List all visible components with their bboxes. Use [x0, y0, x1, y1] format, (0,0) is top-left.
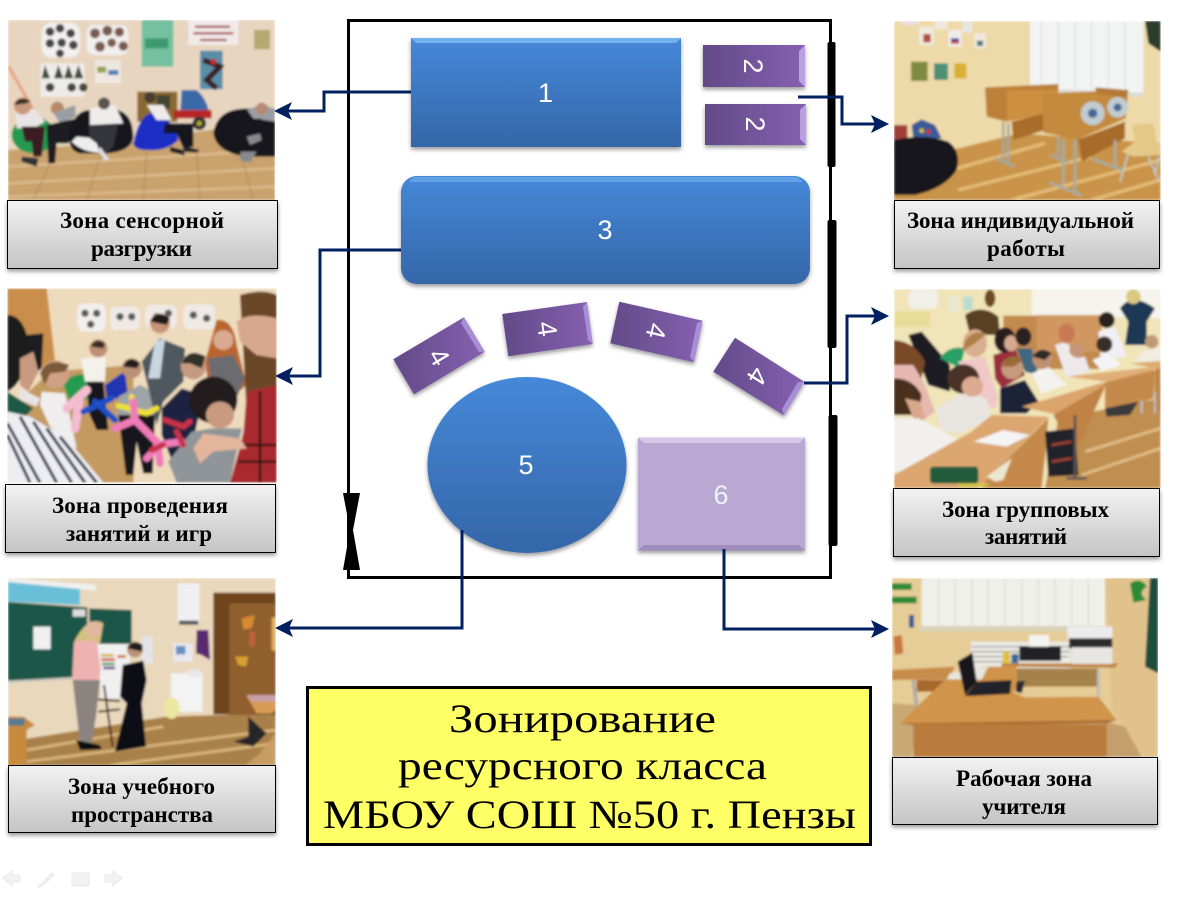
zone 2 lower: 2: [740, 116, 770, 132]
zone 6: 6: [713, 480, 729, 510]
caption: study space zone: [8, 766, 276, 832]
caption: individual work zone: Зона индивидуальной: [907, 208, 1134, 233]
zone 4 desk C: [610, 302, 703, 362]
window 2: [828, 220, 836, 348]
caption: individual work zone: [894, 200, 1160, 268]
caption: group lessons zone: занятий: [985, 524, 1067, 549]
arrow: zone 1 to sensory zone: [274, 92, 411, 120]
title box: МБОУ СОШ №50 г. Пензы: [323, 792, 856, 837]
zone 2 upper: 2: [738, 58, 768, 74]
zone 1: 1: [538, 78, 553, 108]
zone 1: [411, 38, 681, 147]
zone 5: [428, 377, 626, 553]
zone 4 desk A: 4: [422, 343, 456, 371]
photo: individual work zone: [894, 21, 1161, 200]
arrow: zone 3 to games zone: [275, 250, 401, 385]
photo: study space zone: [8, 578, 276, 765]
floor plan: [343, 20, 838, 578]
arrow: zone 6 to teacher zone: [724, 549, 889, 638]
zone 2 upper: [703, 45, 805, 87]
zone 3: [401, 176, 810, 284]
caption: study space zone: пространства: [71, 802, 214, 827]
zone 2 lower: [705, 104, 806, 145]
zone 4 desk A: [393, 317, 485, 394]
caption: group lessons zone: Зона групповых: [942, 497, 1110, 522]
caption: lessons and games zone: занятий и игр: [66, 521, 212, 546]
arrow: zone 5 to study zone: [275, 530, 462, 637]
title box: ресурсного класса: [398, 743, 767, 788]
caption: study space zone: Зона учебного: [68, 774, 215, 799]
zone 5: 5: [518, 450, 534, 480]
photo: sensory zone: [8, 20, 275, 200]
caption: individual work zone: работы: [987, 236, 1065, 261]
caption: lessons and games zone: [6, 484, 276, 552]
zone 3: 3: [597, 215, 613, 245]
window 1: [828, 42, 836, 167]
caption: group lessons zone: [894, 488, 1160, 556]
title box: [308, 688, 870, 844]
zone 4 desk B: 4: [531, 319, 563, 339]
caption: teacher work zone: учителя: [982, 794, 1066, 819]
arrow: zone 4 to group zone: [804, 307, 889, 383]
caption: sensory zone: разгрузки: [91, 236, 192, 261]
zone 4 desk B: [502, 302, 593, 356]
arrow: zone 2 to individual zone: [798, 97, 889, 133]
door: [343, 493, 360, 570]
caption: teacher work zone: Рабочая зона: [956, 766, 1092, 791]
photo: lessons and games zone: [7, 288, 277, 483]
zone 4 desk D: 4: [740, 362, 774, 390]
photo: teacher work zone: [892, 578, 1158, 757]
window 3: [828, 415, 838, 546]
slideshow navigation icons: [3, 871, 122, 887]
zone 4 desk C: 4: [640, 320, 672, 342]
photo: group lessons zone: [894, 289, 1161, 488]
caption: teacher work zone: [892, 758, 1158, 824]
caption: sensory zone: [8, 200, 278, 268]
zone 6: [638, 438, 805, 550]
caption: sensory zone: Зона сенсорной: [60, 208, 224, 233]
zone 4 desk D: [713, 338, 804, 415]
caption: lessons and games zone: Зона проведения: [52, 493, 228, 518]
title box: Зонирование: [449, 696, 716, 741]
